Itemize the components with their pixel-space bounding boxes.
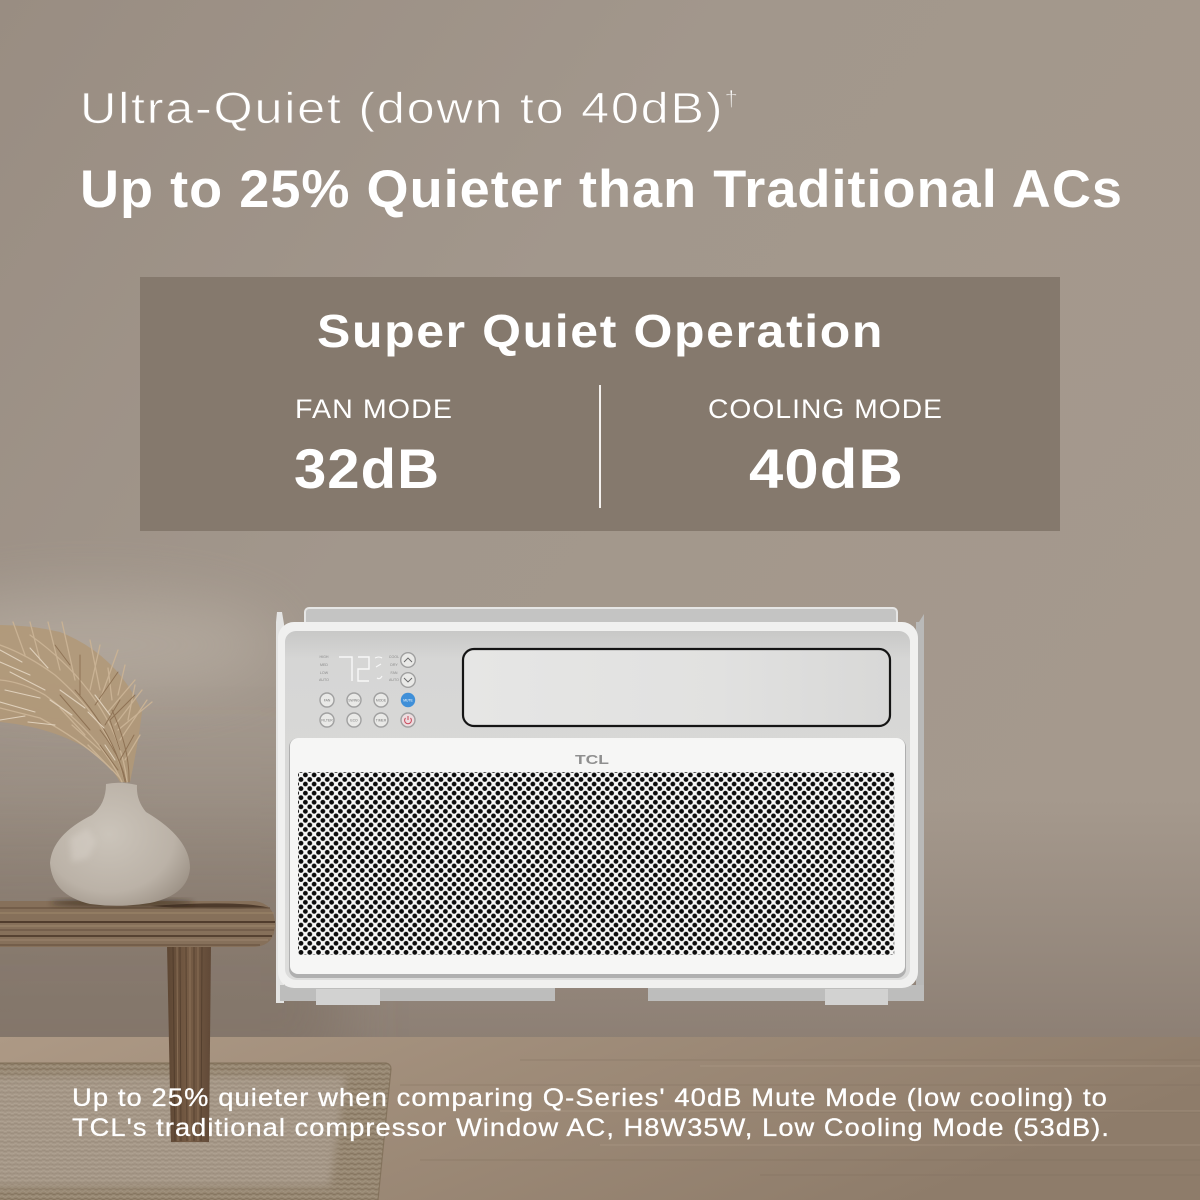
round function buttons xyxy=(320,693,415,727)
headline: ultra-quiet: † xyxy=(724,86,740,111)
rug xyxy=(0,1060,391,1200)
round function buttons: FAN xyxy=(324,698,331,702)
perforated dot area xyxy=(298,772,894,955)
vase xyxy=(50,783,190,906)
brand logo: TCL xyxy=(575,753,609,767)
footnote text xyxy=(72,1084,1110,1142)
headline: ultra-quiet: Ultra-Quiet (down to 40dB) xyxy=(80,84,642,133)
mode labels: LOW xyxy=(320,671,329,675)
round function buttons: MODE xyxy=(376,698,387,702)
mode labels: AUTO xyxy=(319,678,329,682)
fan mode label: FAN MODE xyxy=(295,394,453,424)
up and down buttons xyxy=(401,653,415,687)
panel heading: Super Quiet Operation xyxy=(317,305,884,357)
round function buttons: MUTE xyxy=(403,698,414,702)
headline: up to 25% quieter: Up to 25% Quieter than Traditional ACs xyxy=(80,160,1123,219)
table with wooden top and leg xyxy=(0,901,275,1142)
cooling mode value: 40dB xyxy=(749,437,904,500)
air conditioner unit xyxy=(276,608,924,1005)
round function buttons: SWING xyxy=(348,698,360,702)
mode labels: FAN xyxy=(390,671,398,675)
bottom mounting strips xyxy=(280,985,924,1005)
centre divider xyxy=(599,385,601,508)
mode labels: DRY xyxy=(390,663,398,667)
mode labels: AUTO xyxy=(389,678,399,682)
panel: super quiet operation xyxy=(140,277,1060,531)
vase shadow xyxy=(50,900,194,906)
room background: floor xyxy=(0,1037,1200,1200)
air vent panel xyxy=(463,649,890,726)
mode labels xyxy=(319,655,399,682)
mode labels: MED xyxy=(320,663,328,667)
mode labels: COOL xyxy=(389,655,399,659)
rear top flange xyxy=(305,608,897,626)
left side bracket xyxy=(276,612,284,1003)
table top xyxy=(0,901,275,947)
footnote text: Up to 25% quieter when comparing Q-Series' 40dB Mute Mode (low cooling) to xyxy=(72,1084,1108,1112)
round function buttons: FILTER xyxy=(321,718,333,722)
footnote text: TCL's traditional compressor Window AC, H8W35W, Low Cooling Mode (53dB). xyxy=(72,1114,1110,1142)
dried pampas plume xyxy=(0,622,152,782)
front grille xyxy=(289,738,906,978)
mode labels: HIGH xyxy=(320,655,329,659)
right side bracket xyxy=(916,614,924,1001)
round function buttons: ECO xyxy=(350,718,358,722)
round function buttons: TIMER xyxy=(376,718,387,722)
body shell xyxy=(278,622,918,988)
cooling mode label: COOLING MODE xyxy=(708,394,943,424)
inner recess xyxy=(285,631,910,980)
fan mode value: 32dB xyxy=(294,437,440,500)
temperature display 72 xyxy=(339,657,382,681)
control panel xyxy=(319,653,415,727)
table leg xyxy=(167,945,211,1142)
